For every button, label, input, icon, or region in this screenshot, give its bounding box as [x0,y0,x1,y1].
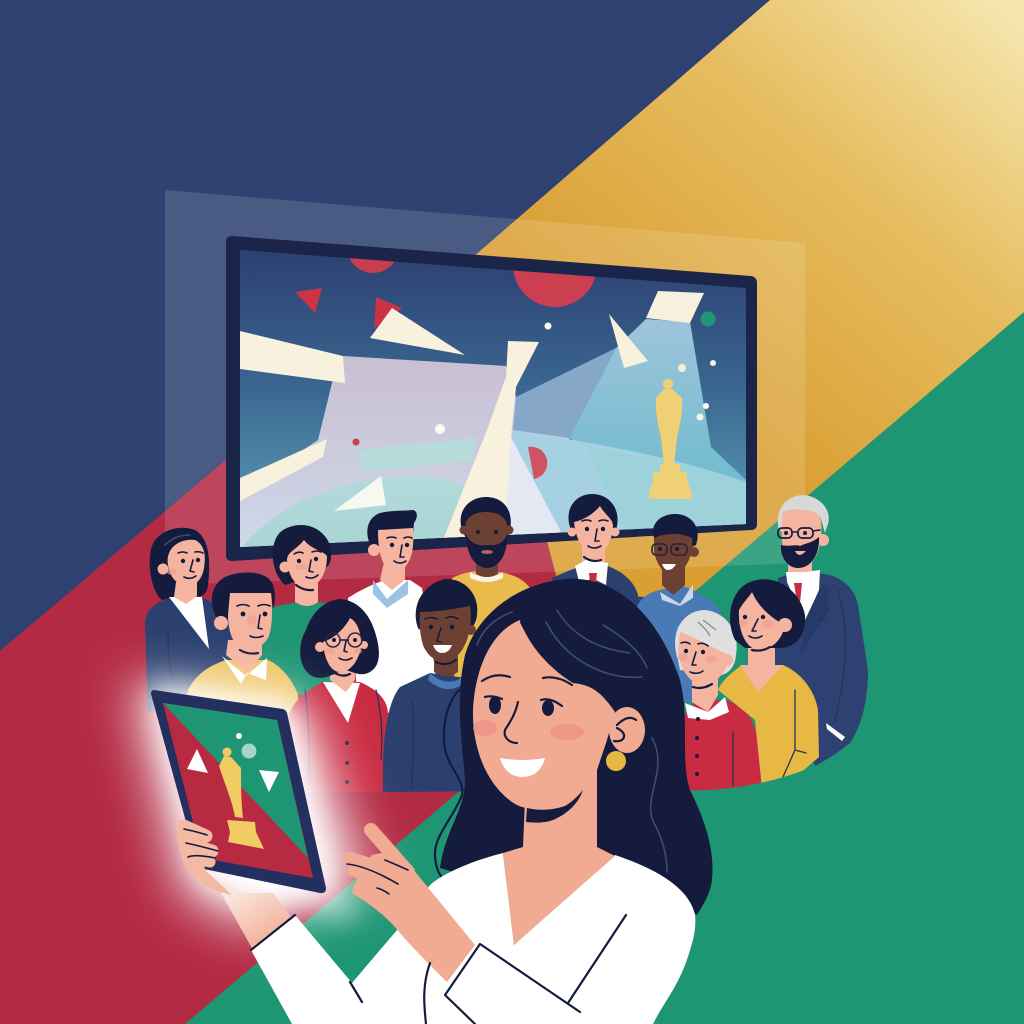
tablet glow [128,680,372,930]
screen bezel [226,236,757,561]
face [473,620,615,809]
person: older woman in red cardigan [675,610,762,792]
person: woman in yellow sweater [718,579,819,788]
person: man in yellow sweater [187,572,298,718]
earring [606,751,626,771]
tablet display [163,703,313,878]
tablet frame [151,690,326,893]
hair highlights [477,610,667,872]
screen artwork [240,250,746,547]
person: woman with glasses in red vest [288,599,388,792]
person: woman in navy jacket [145,528,240,712]
sleeve and cuff lines [251,915,626,1024]
person: man in suit with red tie [552,494,638,597]
person: man with glasses in blue sweater [637,514,722,705]
translucent panel behind the screen [165,190,805,585]
facial features [473,622,636,777]
person: man in green sweater [258,525,332,696]
blouse [251,853,695,1024]
screen [226,221,757,561]
tablet statuette [219,748,264,849]
audience group [145,494,868,800]
hair back [440,579,713,915]
person: bearded man in yellow sweater [452,497,530,678]
person: older man with beard in navy suit [770,495,868,768]
hair strand [435,690,462,876]
left arm [215,882,292,950]
tablet [151,690,326,893]
neck and chest [503,770,615,945]
screen statuette [649,379,692,499]
ear [609,707,645,753]
main woman [251,579,713,1024]
jaw shadow [526,790,583,823]
person: dark-skinned man in navy sweater [383,579,480,800]
person: man in white sweater [348,510,440,720]
tablet triangles and dots [187,733,279,792]
left hand holding tablet [177,820,232,895]
right arm and hand [347,830,475,982]
